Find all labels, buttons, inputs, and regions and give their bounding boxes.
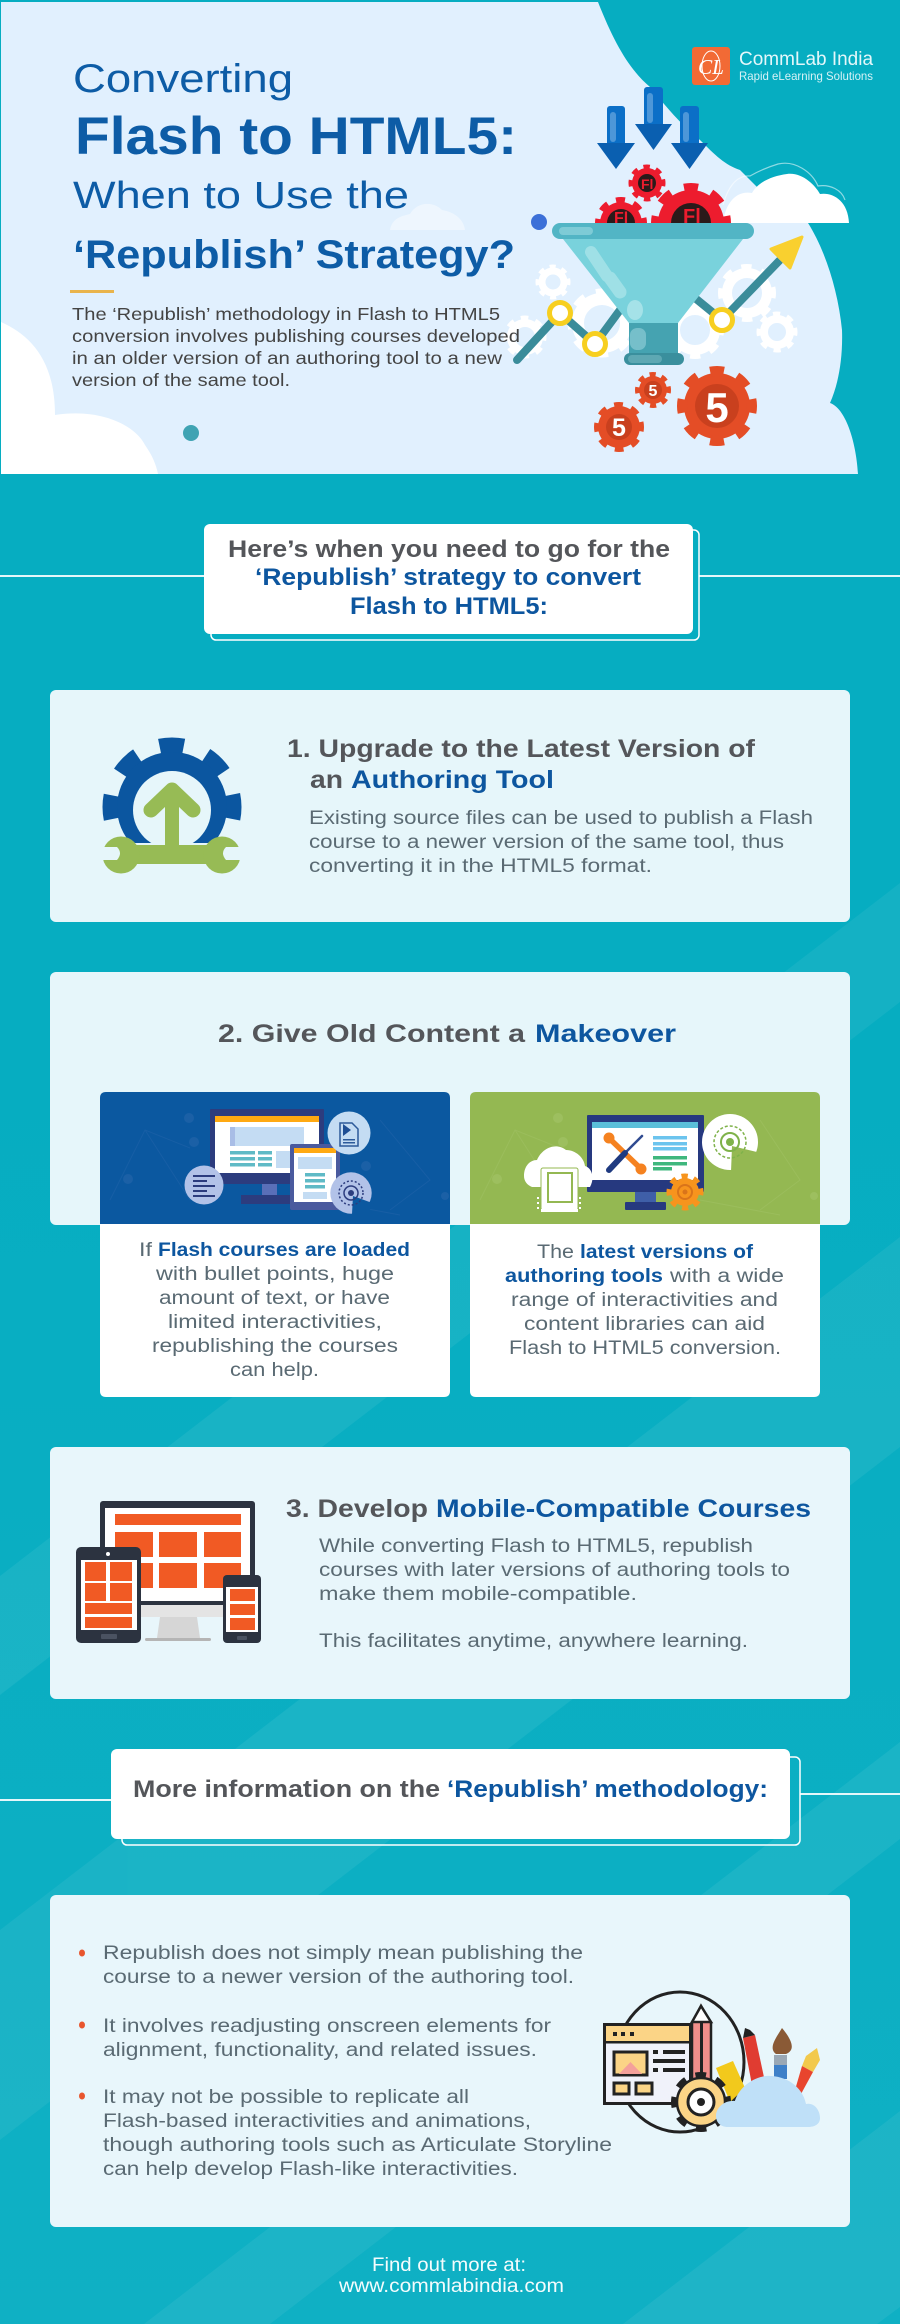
footer: Find out more at: [372,2255,526,2276]
body text: make them mobile-compatible. [319,1584,637,1605]
heading: Authoring Tool [351,766,554,794]
text: latest versions of [580,1242,754,1263]
illustration: monitor with tools [480,1113,818,1215]
logo: CL [698,55,724,79]
intro text: The ‘Republish’ methodology in Flash to HTML5 [72,304,500,324]
funnel [552,223,754,365]
heading: Makeover [535,1020,676,1048]
accent bar [70,290,114,293]
icon: responsive devices [76,1501,261,1643]
panel: 2 makeover [50,972,850,1397]
body text: Existing source files can be used to publish a Flash [309,808,813,829]
cloud: bottom left [1,322,158,474]
red flash gears: Fl [683,206,701,228]
text: The [537,1242,574,1263]
intro text: version of the same tool. [72,370,290,390]
footer [338,2255,564,2297]
panel: bullet list [50,1895,850,2227]
icon: design tools [604,1992,820,2132]
footer: www.commlabindia.com [338,2276,564,2297]
text: Flash to HTML5 conversion. [509,1338,781,1359]
body text: This facilitates anytime, anywhere learning. [319,1631,748,1652]
title: Converting [73,57,293,101]
text [139,1240,410,1381]
heading: Mobile-Compatible Courses [436,1495,811,1523]
intro text: in an older version of an authoring tool to a new [72,348,502,368]
red flash gears: Fl [641,176,653,192]
section heading: more information: ‘Republish’ methodology: [447,1776,768,1803]
title [73,57,517,277]
text: authoring tools [505,1266,663,1287]
body text: converting it in the HTML5 format. [309,856,652,877]
orange HTML5 gears: 5 [612,414,626,442]
bullet text: Flash-based interactivities and animations, [103,2111,531,2132]
bullet text: It involves readjusting onscreen elements for [103,2016,552,2037]
orange HTML5 gears: 5 [649,383,658,400]
text: can help. [230,1360,319,1381]
body text [319,1536,790,1652]
text: Flash courses are loaded [158,1240,410,1261]
orange HTML5 gears [597,371,752,449]
heading: 2. Give Old Content a [218,1020,526,1048]
text: limited interactivities, [168,1312,382,1333]
red flash gears: Fl [614,210,628,227]
heading: an [310,766,343,794]
orange HTML5 gears: 5 [705,384,729,431]
section heading: when to republish [204,524,699,640]
text: content libraries can aid [524,1314,765,1335]
bullet text: Republish does not simply mean publishing the [103,1943,583,1964]
title: ‘Republish’ Strategy? [73,233,515,277]
panel: 3 mobile-compatible [50,1447,850,1699]
card: flash courses [100,1092,450,1397]
section heading: more information [111,1749,800,1845]
intro text: conversion involves publishing courses developed [72,326,520,346]
hero panel [1,2,858,474]
bullet text: alignment, functionality, and related issues. [103,2040,537,2061]
bullet text: course to a newer version of the authoring tool. [103,1967,574,1988]
illustration: monitor and tablet [110,1109,449,1215]
section heading: when to republish: ‘Republish’ strategy to convert [255,564,641,591]
section heading: more information: More information on the [133,1776,440,1803]
panel: 1 upgrade [50,690,850,922]
heading [287,735,756,794]
bullet text: can help develop Flash-like interactivities. [103,2159,518,2180]
cloud: top right [723,163,849,223]
heading: 3. Develop [286,1495,428,1523]
white background gears [506,267,795,356]
section heading: when to republish: Here’s when you need to go for the [228,536,670,563]
intro text [72,304,520,390]
bullet text [103,1943,612,2180]
text: If [139,1240,153,1261]
title: When to Use the [73,175,409,217]
blue input arrows [597,87,708,169]
heading [286,1495,811,1523]
body text: While converting Flash to HTML5, republish [319,1536,753,1557]
dot: blue [531,214,547,230]
logo: Rapid eLearning Solutions [739,69,873,83]
text: range of interactivities and [511,1290,778,1311]
logo: CommLab India [739,49,873,70]
card: latest versions [470,1092,820,1397]
text: with a wide [669,1266,784,1287]
text [505,1242,784,1359]
heading [218,1020,676,1048]
cloud: faint behind title [390,204,465,230]
red flash gears [595,164,731,223]
trend line [517,237,802,360]
body text [309,808,813,877]
body text: courses with later versions of authoring tools to [319,1560,790,1581]
bullets [79,1950,85,2100]
heading: 1. Upgrade to the Latest Version of [287,735,756,763]
icon: gear with arrow and wrench [100,746,244,878]
section heading: when to republish: Flash to HTML5: [350,593,548,620]
funnel illustration [506,87,849,449]
bullet text: though authoring tools such as Articulate Storyline [103,2135,612,2156]
logo [692,47,873,85]
divider lines [0,575,900,1801]
title: Flash to HTML5: [75,107,517,166]
dot: teal [183,425,199,441]
bullet text: It may not be possible to replicate all [103,2087,469,2108]
body text: course to a newer version of the same tool, thus [309,832,784,853]
text: republishing the courses [152,1336,398,1357]
text: with bullet points, huge [155,1264,394,1285]
text: amount of text, or have [159,1288,390,1309]
